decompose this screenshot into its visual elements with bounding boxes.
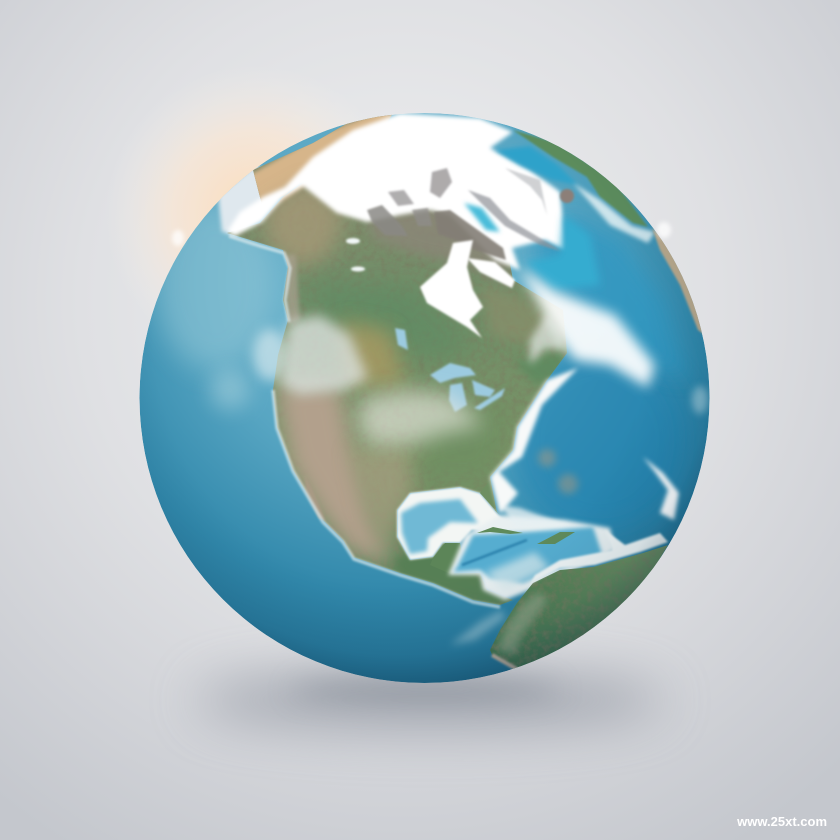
west coast shelf — [229, 236, 500, 607]
Pacific haze — [155, 200, 275, 370]
sea ice — [227, 113, 566, 270]
north coast shelf — [530, 530, 668, 584]
Atlantic deep blue — [508, 351, 680, 522]
Baja California — [305, 482, 326, 521]
Hudson Bay ice — [420, 240, 483, 338]
Cuba — [477, 527, 523, 534]
Pacific near Panama cloud — [450, 610, 505, 645]
Nova Scotia green — [518, 353, 564, 384]
North America land — [215, 105, 575, 610]
orange lens flare spots — [538, 449, 578, 494]
central cloud band — [358, 390, 485, 445]
Canada green — [314, 280, 461, 364]
Baffin Island — [434, 210, 506, 260]
Labrador Sea blue — [530, 215, 690, 380]
arctic ice cap — [227, 113, 566, 270]
Yukon tan — [265, 180, 345, 270]
South America — [490, 530, 668, 672]
globe — [140, 105, 712, 683]
Bahamas shoals — [501, 504, 560, 522]
Gulf inner water — [401, 499, 478, 554]
Gulf white shelf — [397, 487, 510, 560]
western desert pink — [275, 385, 392, 565]
Arctic grey-brown — [372, 212, 508, 271]
Central America green — [395, 544, 487, 600]
offshore cloud — [253, 329, 287, 381]
Gulf of Mexico — [397, 487, 510, 575]
Greenland east edge — [505, 168, 547, 215]
Labrador Sea water — [525, 215, 600, 290]
Florida — [480, 484, 500, 514]
Andes light tone — [497, 592, 548, 655]
Davis Strait water — [464, 203, 500, 232]
Alaska tan — [254, 115, 392, 204]
ground shadow — [195, 670, 665, 730]
Africa tan limb — [652, 228, 712, 340]
east coast white shelf — [490, 368, 578, 514]
Greenland west edge — [468, 190, 563, 252]
Arctic islands — [388, 190, 414, 206]
watermark: www.25xt.com — [736, 814, 827, 829]
Iceland — [560, 189, 574, 203]
Caribbean shoals — [448, 515, 615, 600]
Scandinavia land strip — [513, 130, 648, 227]
sphere limb shading — [140, 113, 710, 683]
Hispaniola — [537, 532, 575, 544]
plains tan — [340, 320, 405, 385]
sun glow behind globe — [105, 65, 405, 365]
faint Pacific cloud — [210, 370, 250, 410]
eastern US green — [422, 418, 499, 472]
cloud tufts at the limb — [172, 222, 671, 246]
Banks and Victoria islands — [367, 205, 408, 236]
western cloud — [280, 315, 368, 395]
southern plains — [350, 450, 415, 555]
Great Lakes — [395, 328, 505, 412]
Bering Sea haze — [218, 165, 268, 234]
Hudson Strait ice — [467, 258, 515, 288]
Yucatan — [433, 543, 462, 573]
Rockies rock — [283, 255, 300, 325]
Peru coast — [492, 655, 560, 671]
shoal streak — [485, 552, 550, 590]
Baffin Bay water — [495, 146, 578, 185]
Quebec brown — [482, 288, 542, 343]
Atlantic cloud — [643, 457, 679, 520]
St Lawrence cloud — [530, 312, 566, 365]
land base — [215, 105, 575, 610]
Ellesmere islands — [430, 168, 452, 198]
Cayman trench — [462, 540, 527, 565]
Caribbean — [448, 505, 615, 600]
inland lakes — [346, 238, 365, 272]
Labrador cloud band — [520, 268, 655, 388]
Caribbean water — [453, 527, 603, 583]
ocean — [140, 113, 710, 683]
Norway white coast — [573, 183, 655, 243]
Atlantic limb cloud — [692, 386, 708, 414]
